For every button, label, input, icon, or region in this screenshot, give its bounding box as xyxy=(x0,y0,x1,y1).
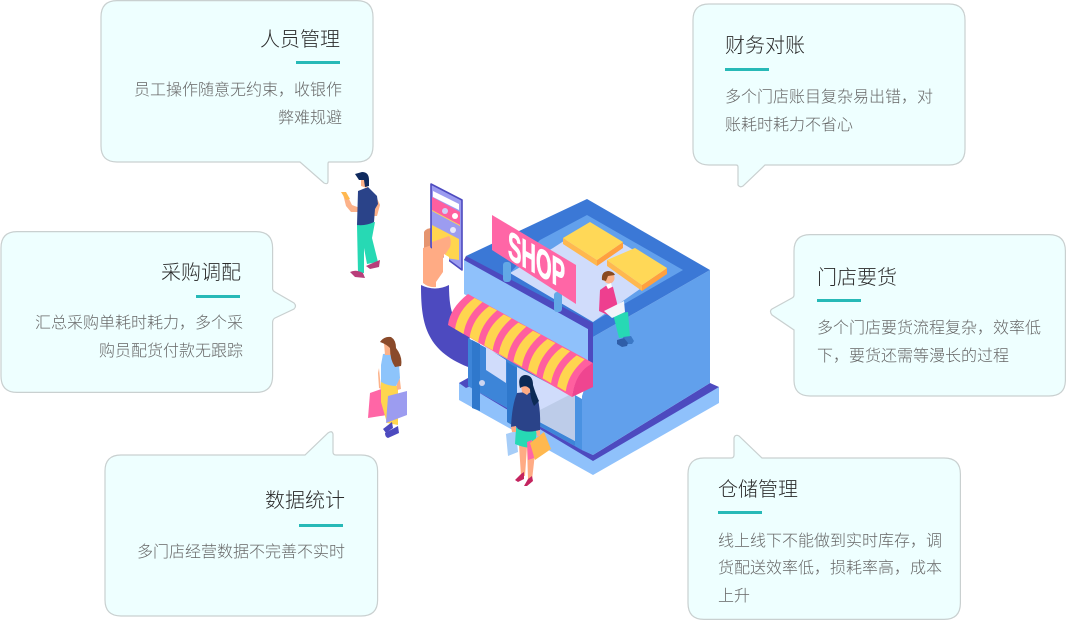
heading: 采购调配 xyxy=(161,262,241,284)
heading: 仓储管理 xyxy=(718,479,798,501)
description: 多个门店账目复杂易出错，对 xyxy=(725,89,933,106)
sign posts xyxy=(503,262,562,312)
description: 线上线下不能做到实时库存，调 xyxy=(718,533,942,550)
description xyxy=(817,319,1041,365)
building roof xyxy=(466,199,710,337)
raised hand xyxy=(423,228,451,287)
panel: 仓储管理 xyxy=(687,434,961,620)
description: 多个门店要货流程复杂，效率低 xyxy=(817,320,1041,337)
panel: 采购调配 xyxy=(0,231,296,393)
panel: 财务对账 xyxy=(692,3,966,188)
description: 汇总采购单耗时耗力，多个采 xyxy=(35,315,243,332)
roof box right xyxy=(607,248,667,291)
description xyxy=(134,81,342,127)
description xyxy=(35,314,243,360)
roof box left xyxy=(563,222,623,266)
description: 货配送效率低，损耗率高，成本 xyxy=(718,560,942,577)
panel: 数据统计 xyxy=(104,431,378,617)
smartphone xyxy=(431,184,462,270)
SHOP sign xyxy=(492,215,576,304)
striped awning xyxy=(448,294,593,397)
shop facade band xyxy=(464,256,593,366)
customer arm sleeve xyxy=(421,285,470,367)
description: 上升 xyxy=(718,588,750,605)
panel: 人员管理 xyxy=(100,0,374,184)
man with phone xyxy=(341,172,380,278)
SHOP sign: SHOP xyxy=(508,223,565,299)
building base plinth xyxy=(459,378,719,475)
heading: 门店要货 xyxy=(817,267,897,289)
storefront lower wall xyxy=(468,338,582,450)
description xyxy=(725,88,933,134)
person sitting on roof xyxy=(599,271,634,347)
heading: 人员管理 xyxy=(260,29,340,51)
woman with shopping bags xyxy=(368,337,407,438)
description: 多门店经营数据不完善不实时 xyxy=(137,544,345,561)
description: 下，要货还需等漫长的过程 xyxy=(817,348,1009,365)
panel: 门店要货 xyxy=(770,234,1066,397)
description: 账耗时耗力不省心 xyxy=(725,117,853,134)
heading: 财务对账 xyxy=(725,35,805,57)
building right wall xyxy=(582,270,710,455)
description: 购员配货付款无跟踪 xyxy=(99,343,243,360)
description xyxy=(718,532,942,605)
woman in front of shop xyxy=(506,375,551,486)
heading: 数据统计 xyxy=(265,490,345,512)
description: 员工操作随意无约束，收银作 xyxy=(134,82,342,99)
description: 弊难规避 xyxy=(278,110,342,127)
